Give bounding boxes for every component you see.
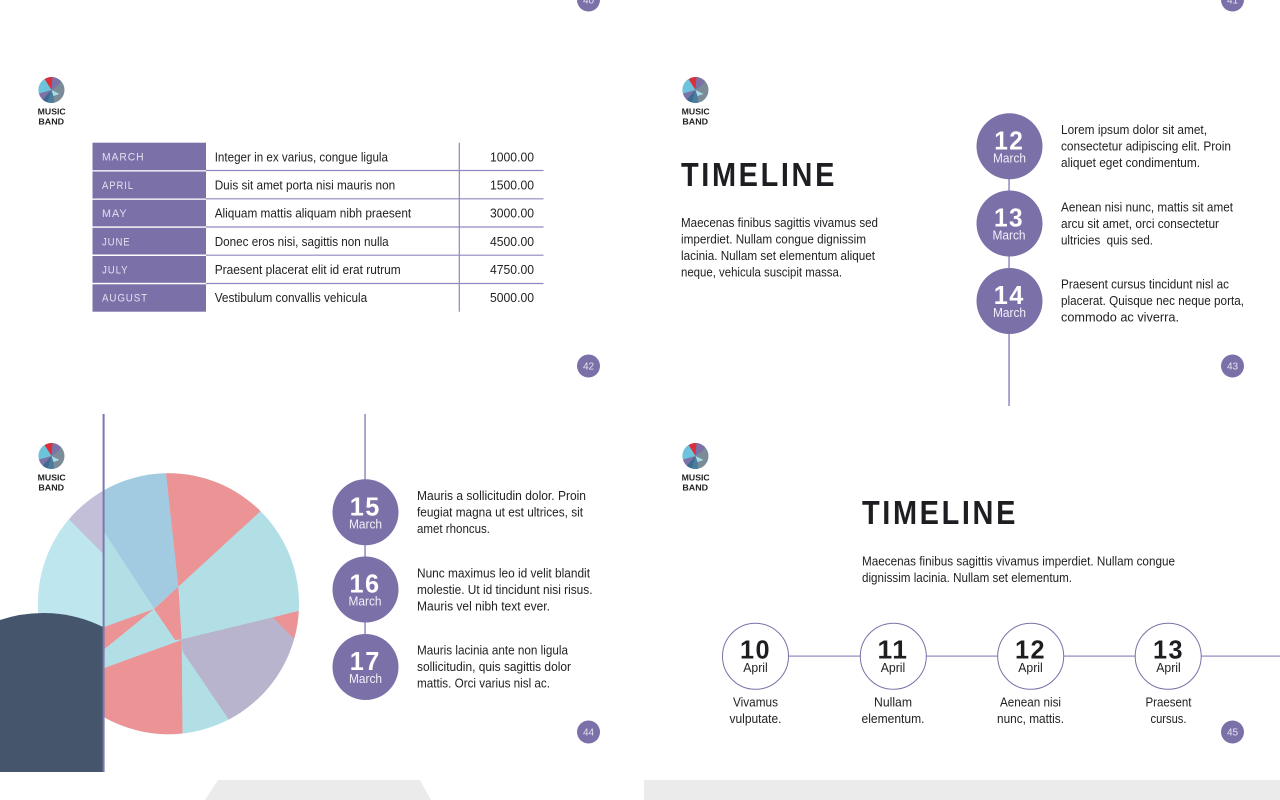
text for 16 March: Mauris vel nibh text ever. (417, 599, 550, 613)
table of monthly values: 4750.00 (490, 263, 534, 277)
date 13 April: 13 (1153, 634, 1184, 664)
date 16 March: March (348, 594, 382, 608)
page number 45: 45 (1227, 728, 1238, 738)
text for 16 March: Nunc maximus leo id velit blandit (417, 566, 590, 580)
table of monthly values: JUNE (102, 236, 130, 248)
text for 17 March: sollicitudin, quis sagittis dolor (417, 660, 571, 674)
caption for 10 April: Vivamus (733, 696, 778, 710)
page number 44: 44 (583, 728, 594, 738)
text for 15 March: amet rhoncus. (417, 522, 490, 536)
page number 43 (1221, 354, 1244, 378)
caption for 13 April (1146, 696, 1192, 726)
timeline axis (788, 656, 1280, 657)
table of monthly values: 3000.00 (490, 207, 534, 221)
caption for 13 April: Praesent (1146, 696, 1192, 710)
table of monthly values: 5000.00 (490, 291, 534, 305)
intro paragraph: dignissim lacinia. Nullam set elementum. (862, 571, 1072, 585)
date 11 April: 11 (878, 634, 908, 664)
table of monthly values: Donec eros nisi, sagittis non nulla (215, 235, 389, 249)
date 12 March: March (993, 151, 1026, 165)
page number 42 (577, 354, 600, 378)
heading: timeline: TIMELINE (681, 156, 837, 193)
logo: music band bottom right: MUSIC (682, 473, 710, 483)
page number 44 (577, 720, 600, 744)
logo: music band bottom left: MUSIC (38, 473, 66, 483)
intro paragraph: neque, vehicula suscipit massa. (681, 266, 842, 280)
text for 14 March: Praesent cursus tincidunt nisl ac (1061, 278, 1229, 292)
panel: slide 43 vertical timeline (681, 76, 1244, 406)
text for 13 March: arcu sit amet, orci consectetur (1061, 217, 1219, 231)
table of monthly values: Vestibulum convallis vehicula (215, 291, 367, 305)
text for 13 March: Aenean nisi nunc, mattis sit amet (1061, 200, 1233, 214)
date 13 March (976, 190, 1042, 256)
text for 12 March: Lorem ipsum dolor sit amet, (1061, 123, 1207, 137)
dark navy semicircle (0, 613, 103, 772)
text for 15 March (417, 489, 586, 536)
table of monthly values: Aliquam mattis aliquam nibh praesent (215, 207, 412, 221)
date 13 March: March (992, 228, 1026, 242)
pie chart graphic (38, 473, 299, 734)
date 12 March (976, 113, 1042, 179)
text for 17 March: Mauris lacinia ante non ligula (417, 644, 568, 658)
page number 45 (1221, 720, 1244, 744)
next slide hatched shape left (205, 780, 431, 800)
intro paragraph (681, 216, 878, 280)
date 14 March (976, 268, 1042, 334)
page number 43: 43 (1227, 362, 1238, 372)
date 12 April: 12 (1015, 634, 1046, 664)
intro paragraph: imperdiet. Nullam congue dignissim (681, 232, 866, 246)
date 11 April (860, 623, 926, 689)
text for 14 March (1061, 278, 1244, 325)
caption for 12 April: nunc, mattis. (997, 712, 1064, 726)
date 15 March: 15 (350, 492, 381, 522)
date 16 March: 16 (350, 569, 380, 599)
table of monthly values (92, 143, 544, 312)
caption for 11 April: Nullam (874, 696, 912, 710)
logo: music band bottom right: BAND (682, 482, 708, 492)
table of monthly values: Integer in ex varius, congue ligula (215, 150, 388, 164)
date 14 March: 14 (994, 280, 1025, 310)
date 17 March: 17 (350, 646, 381, 676)
logo: music band top right: BAND (682, 116, 708, 126)
caption for 10 April (730, 696, 782, 726)
date 13 April (1135, 623, 1201, 689)
caption for 12 April: Aenean nisi (1000, 696, 1061, 710)
panel: slide 42 table (38, 76, 544, 312)
timeline axis (364, 414, 366, 654)
date 14 March: March (993, 306, 1026, 320)
date 10 April (722, 623, 788, 689)
logo: music band top left (38, 76, 66, 126)
caption for 12 April (997, 696, 1064, 726)
table of monthly values: 4500.00 (490, 235, 534, 249)
table of monthly values: MAY (102, 208, 128, 220)
logo: music band bottom left: BAND (38, 482, 64, 492)
text for 14 March: commodo ac viverra. (1061, 311, 1179, 325)
date 15 March (332, 479, 398, 545)
date 17 March (332, 634, 398, 700)
intro paragraph: Maecenas finibus sagittis vivamus imperdiet. Nullam congue (862, 554, 1175, 568)
text for 12 March: consectetur adipiscing elit. Proin (1061, 140, 1231, 154)
table of monthly values: APRIL (102, 180, 134, 192)
text for 13 March: ultricies quis sed. (1061, 233, 1153, 247)
date 11 April: April (881, 661, 905, 675)
text for 17 March: mattis. Orci varius nisl ac. (417, 677, 550, 691)
text for 16 March (417, 566, 592, 613)
text for 15 March: feugiat magna ut est ultrices, sit (417, 506, 583, 520)
page number 40 (577, 0, 600, 12)
caption for 11 April (862, 696, 924, 726)
logo: music band top left: MUSIC (38, 107, 66, 117)
intro paragraph (862, 554, 1175, 585)
vertical accent line (103, 414, 105, 772)
date 12 March: 12 (994, 126, 1024, 156)
page number 42: 42 (583, 362, 594, 372)
date 12 April (998, 623, 1064, 689)
caption for 13 April: cursus. (1150, 712, 1186, 726)
text for 12 March: aliquet eget condimentum. (1061, 156, 1200, 170)
caption for 11 April: elementum. (862, 712, 924, 726)
date 17 March: March (349, 672, 382, 686)
text for 12 March (1061, 123, 1231, 170)
date 15 March: March (349, 517, 382, 531)
date 16 March (332, 556, 398, 622)
page number 41 (1221, 0, 1244, 12)
text for 13 March (1061, 200, 1233, 247)
date 12 April: April (1018, 661, 1043, 675)
heading: timeline: TIMELINE (862, 494, 1018, 531)
text for 17 March (417, 644, 571, 691)
logo: music band bottom left (38, 442, 66, 492)
date 13 April: April (1156, 661, 1181, 675)
logo: music band top right: MUSIC (682, 107, 710, 117)
timeline axis (1008, 114, 1010, 406)
logo: music band bottom right (682, 442, 710, 492)
text for 14 March: placerat. Quisque nec neque porta, (1061, 294, 1244, 308)
panel: slide 44 pie and timeline (0, 414, 592, 772)
date 13 March: 13 (994, 203, 1024, 233)
date 10 April: 10 (740, 634, 771, 664)
panel: slide 45 horizontal timeline (682, 442, 1280, 726)
logo: music band top right (682, 76, 710, 126)
logo: music band top left: BAND (38, 116, 64, 126)
table of monthly values: 1500.00 (490, 179, 534, 193)
text for 15 March: Mauris a sollicitudin dolor. Proin (417, 489, 586, 503)
intro paragraph: lacinia. Nullam set elementum aliquet (681, 249, 875, 263)
table of monthly values: 1000.00 (490, 150, 534, 164)
intro paragraph: Maecenas finibus sagittis vivamus sed (681, 216, 878, 230)
table of monthly values: MARCH (102, 152, 144, 164)
table of monthly values: Duis sit amet porta nisi mauris non (215, 179, 395, 193)
next slide hatched band right (644, 780, 1280, 800)
caption for 10 April: vulputate. (730, 712, 782, 726)
table of monthly values: AUGUST (102, 293, 148, 305)
table of monthly values: JULY (102, 264, 128, 276)
text for 16 March: molestie. Ut id tincidunt nisi risus. (417, 583, 592, 597)
date 10 April: April (743, 661, 768, 675)
table of monthly values: Praesent placerat elit id erat rutrum (215, 263, 401, 277)
